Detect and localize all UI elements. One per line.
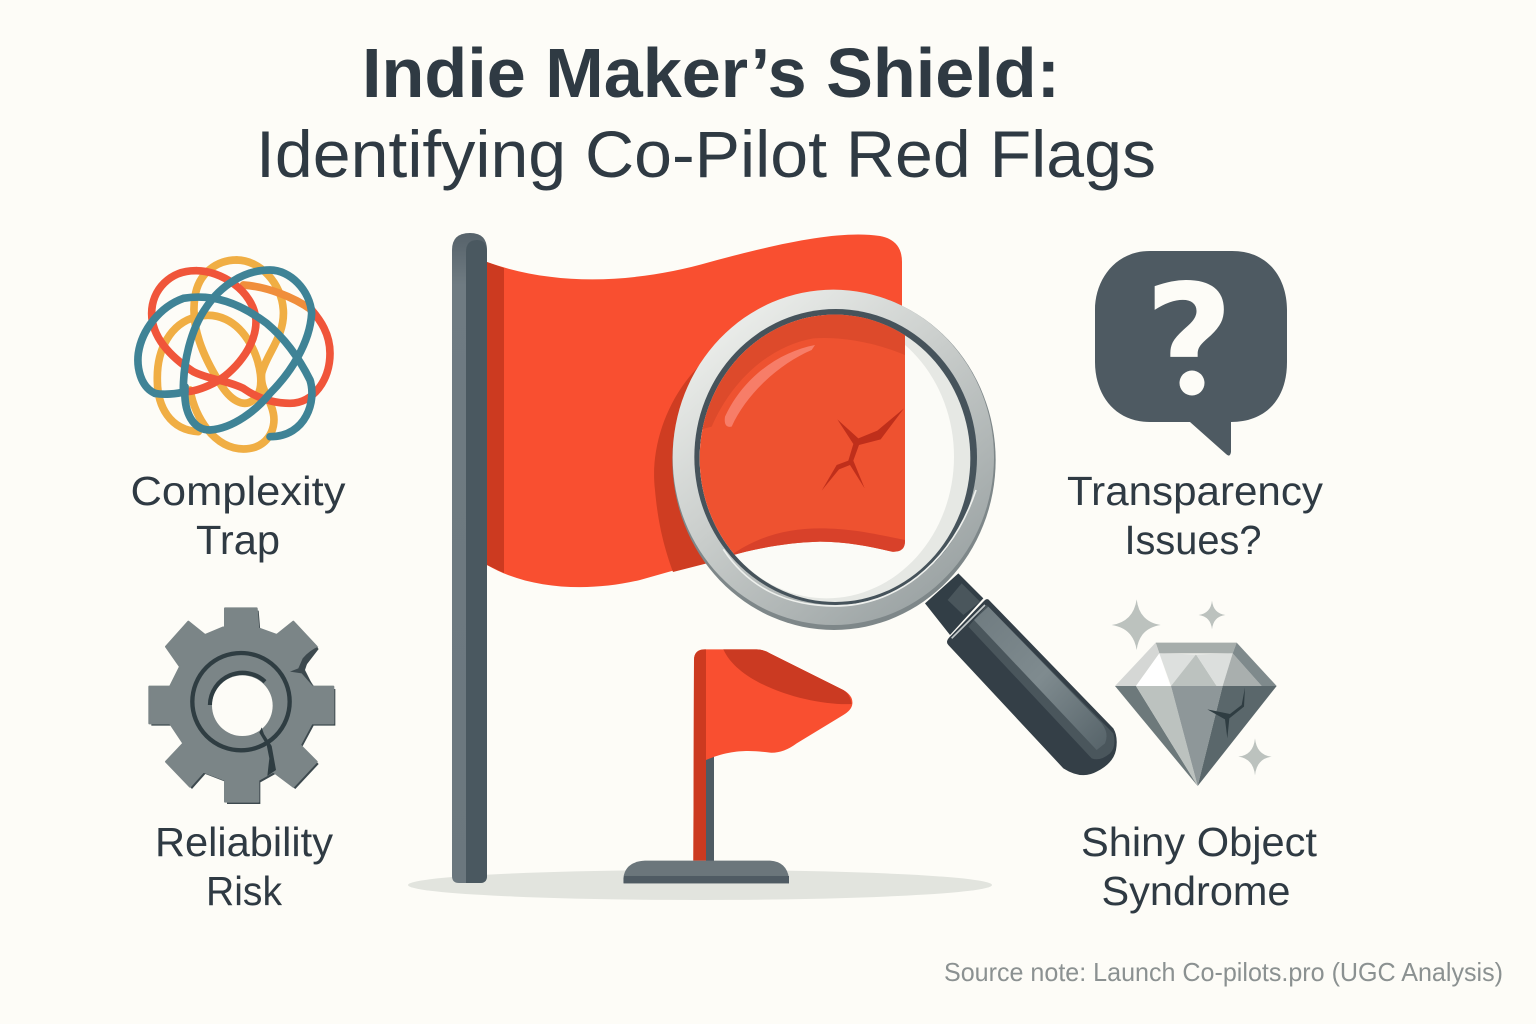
icon: cracked diamond with sparkles bbox=[1112, 599, 1277, 786]
magnifier cast shadow bbox=[654, 365, 730, 572]
label: Shiny Object Syndrome: Shiny Object bbox=[1081, 819, 1318, 865]
lens glass bbox=[700, 314, 970, 602]
handle grip bbox=[947, 599, 1117, 775]
magnifier handle bbox=[925, 573, 1117, 775]
lens ring bbox=[672, 290, 996, 630]
label: Reliability Risk bbox=[155, 819, 334, 914]
title line 2: Identifying Co-Pilot Red Flags bbox=[256, 117, 1156, 191]
ground shadow bbox=[408, 870, 992, 900]
lens highlight bbox=[725, 345, 815, 427]
left column: reliability risk bbox=[149, 608, 335, 914]
magnified flag bbox=[700, 314, 905, 555]
label: Complexity Trap: Complexity bbox=[130, 468, 346, 514]
label: Transparency Issues?: Transparency bbox=[1067, 468, 1324, 514]
icon: question speech bubble bbox=[1095, 251, 1287, 456]
large flag pole bbox=[452, 233, 487, 883]
gear hole bbox=[212, 675, 273, 736]
flag crack bbox=[822, 408, 904, 491]
small flag base bbox=[623, 861, 789, 883]
small red flag bbox=[623, 649, 852, 883]
icon: cracked gear bbox=[149, 608, 335, 804]
icon: tangled knot bbox=[138, 260, 330, 449]
label: Transparency Issues?: Issues? bbox=[1124, 517, 1262, 563]
label: Reliability Risk: Reliability bbox=[155, 819, 334, 865]
gear cracks bbox=[259, 727, 276, 776]
label: Reliability Risk: Risk bbox=[206, 868, 282, 914]
title bbox=[256, 34, 1156, 191]
right column: shiny object syndrome bbox=[1081, 599, 1318, 914]
label: Shiny Object Syndrome: Syndrome bbox=[1102, 868, 1290, 914]
title line 1: Indie Maker’s Shield: bbox=[362, 34, 1060, 112]
source note: Source note: Launch Co-pilots.pro (UGC Analysis) bbox=[944, 957, 1503, 987]
label: Shiny Object Syndrome bbox=[1081, 819, 1318, 914]
handle collar bbox=[925, 573, 983, 635]
label: Complexity Trap bbox=[130, 468, 346, 563]
label: Transparency Issues? bbox=[1067, 468, 1324, 563]
left column: complexity trap bbox=[130, 260, 346, 563]
right column: transparency issues bbox=[1067, 251, 1324, 563]
magnifying glass bbox=[672, 290, 996, 630]
label: Complexity Trap: Trap bbox=[196, 517, 280, 563]
sparkles bbox=[1112, 599, 1272, 775]
diamond crack bbox=[1207, 687, 1245, 738]
large red flag bbox=[487, 235, 902, 587]
icon: question speech bubble: ? bbox=[1144, 251, 1234, 432]
